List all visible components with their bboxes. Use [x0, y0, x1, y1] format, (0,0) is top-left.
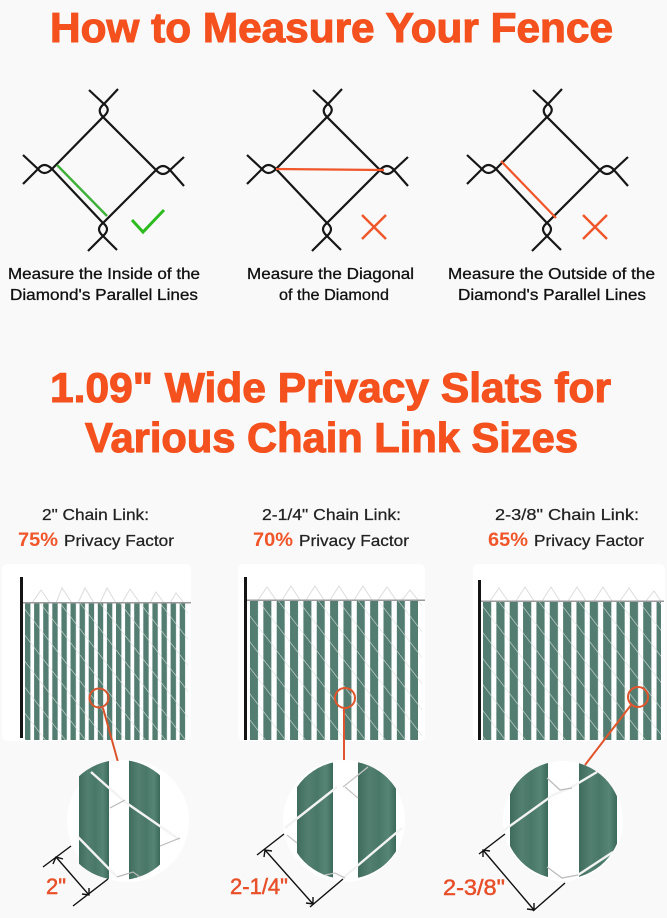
title: How to Measure Your Fence [50, 4, 613, 51]
dimension: 2-3/8 inch: 2-3/8" [443, 875, 505, 900]
label: 2 inch privacy factor: Privacy Factor [64, 533, 175, 550]
dimension: 2-3/8 inch [443, 834, 565, 911]
dimension: 2-1/4 inch: 2-1/4" [230, 874, 288, 899]
label: 2 inch privacy factor: 2" Chain Link: [42, 507, 149, 524]
heading: privacy slats: 1.09" Wide Privacy Slats for [50, 364, 611, 411]
icon: green check [132, 210, 164, 232]
label: 2-3/8 inch privacy factor: 65% [488, 530, 528, 551]
dimension: 2 inch [43, 846, 108, 906]
panel: measure inside [8, 89, 200, 304]
label: 2-1/4 inch privacy factor [253, 507, 410, 551]
icon: red cross [583, 215, 607, 239]
panel: measure outside [448, 89, 655, 304]
detail circle: 2 inch [79, 760, 180, 880]
icon: chain link diamond, outside measure [467, 89, 628, 251]
caption: diagonal: Measure the Diagonal [247, 266, 414, 283]
caption: inside: Diamond's Parallel Lines [10, 287, 198, 304]
label: 2 inch privacy factor [18, 507, 175, 551]
label: 2-1/4 inch privacy factor: 2-1/4" Chain Link: [262, 507, 401, 524]
caption: outside: Diamond's Parallel Lines [458, 287, 646, 304]
caption: outside: Measure the Outside of the [448, 266, 655, 283]
caption: inside [8, 266, 200, 304]
icon: chain link diamond, diagonal measure [247, 89, 408, 251]
caption: diagonal: of the Diamond [279, 287, 389, 304]
caption: inside: Measure the Inside of the [8, 266, 200, 283]
fence photo: 2-3/8 inch [473, 564, 665, 741]
dimension: 2-1/4 inch [230, 834, 343, 907]
callout ring and leader: 2-3/8 inch [585, 687, 648, 765]
fence photo: 2-1/4 inch [238, 564, 425, 741]
caption: diagonal [247, 266, 414, 304]
caption: outside [448, 266, 655, 304]
icon: chain link diamond, inside measure [23, 89, 184, 251]
callout ring and leader: 2-1/4 inch [335, 688, 355, 762]
label: 2-1/4 inch privacy factor: Privacy Factor [299, 533, 410, 550]
panel: measure diagonal [247, 89, 414, 304]
callout ring and leader: 2 inch [90, 688, 118, 762]
label: 2-3/8 inch privacy factor [488, 507, 645, 551]
dimension: 2 inch: 2" [46, 874, 66, 899]
heading: privacy slats [50, 364, 611, 461]
heading: privacy slats: Various Chain Link Sizes [85, 414, 578, 461]
column: 2-1/4 inch chain link [230, 507, 425, 907]
fence photo: 2 inch [2, 564, 191, 741]
column: 2 inch chain link [2, 507, 191, 906]
label: 2 inch privacy factor: 75% [18, 530, 58, 551]
column: 2-3/8 inch chain link [443, 507, 665, 911]
label: 2-3/8 inch privacy factor: Privacy Factor [534, 533, 645, 550]
label: 2-3/8 inch privacy factor: 2-3/8" Chain Link: [495, 507, 639, 524]
icon: red cross [362, 215, 386, 239]
detail circle: 2-3/8 inch [510, 763, 617, 879]
detail circle: 2-1/4 inch [286, 760, 396, 878]
label: 2-1/4 inch privacy factor: 70% [253, 530, 293, 551]
